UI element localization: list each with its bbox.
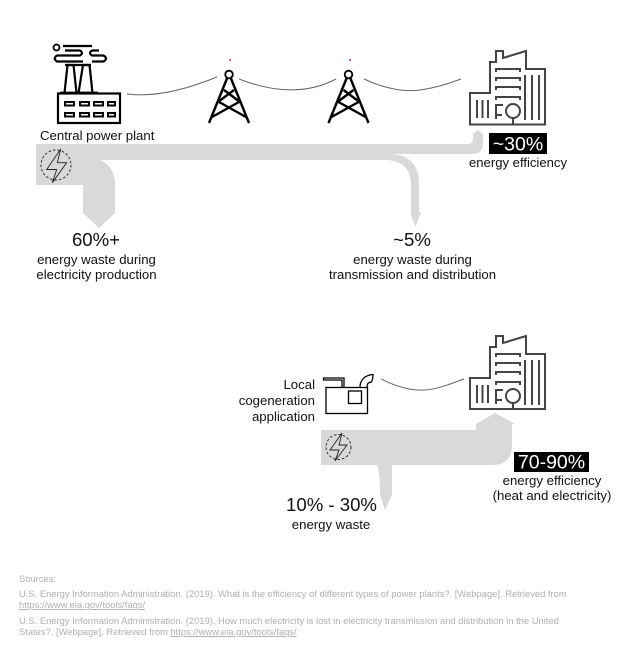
label: energy efficiency bottom: (heat and electricity) (493, 488, 611, 503)
wire: between towers (239, 79, 336, 90)
icon: lightning in dashed circle bottom (326, 433, 351, 461)
label: 30 percent badge (489, 133, 547, 154)
label: energy efficiency bottom: energy efficiency (503, 473, 601, 488)
wire: second tower to building (364, 79, 461, 91)
icon: transmission tower 2 (328, 71, 368, 123)
value: 70-90 percent: 70-90% (518, 452, 585, 474)
sources: https://www.eia.gov/tools/faqs/ (19, 599, 145, 610)
label: 70-90 percent badge (514, 452, 589, 472)
icon: central power plant (54, 44, 120, 123)
value: 5 percent waste: ~5% (393, 229, 431, 250)
sources: U.S. Energy Information Administration. (2019). What is the efficiency of different types of power plants?. [Webpage]. Retrieved from (19, 588, 567, 599)
icon: cogeneration unit (324, 374, 373, 414)
label: production waste: electricity production (36, 267, 157, 282)
wire: plant to first tower (127, 77, 217, 95)
value: 60 percent waste: 60%+ (72, 229, 120, 250)
flow: cogeneration energy sankey (321, 413, 515, 510)
value: 10-30 percent waste: 10% - 30% (286, 494, 377, 515)
icon: transmission tower 1 (209, 71, 249, 123)
icon: city building top (470, 51, 545, 124)
label: transmission waste: energy waste during (353, 252, 472, 267)
label: local cogeneration application: application (252, 409, 315, 424)
sources: States?. [Webpage]. Retrieved from https://www.eia.gov/tools/faqs/ (19, 626, 297, 637)
sources (19, 573, 567, 637)
label: production waste: energy waste during (37, 252, 156, 267)
value: 30 percent: ~30% (493, 134, 543, 156)
sources: U.S. Energy Information Administration. (2019). How much electricity is lost in electricity transmission and distribution in the United (19, 615, 559, 626)
wire: cogeneration to building (381, 379, 464, 390)
flow: central plant energy sankey (36, 130, 483, 228)
sources: Sources: (19, 573, 56, 584)
icon: city building bottom (470, 336, 545, 409)
icon: lightning in dashed circle top (41, 149, 71, 183)
label: transmission waste: transmission and distribution (329, 267, 496, 282)
label: local cogeneration application: Local (283, 377, 315, 392)
label: central power plant: Central power plant (40, 128, 155, 143)
label: local cogeneration application: cogeneration (239, 393, 315, 408)
marker: tower beacon 1 (229, 59, 231, 61)
label: energy efficiency top: energy efficiency (469, 155, 567, 170)
label: energy waste: energy waste (292, 517, 370, 532)
marker: tower beacon 2 (349, 59, 351, 61)
